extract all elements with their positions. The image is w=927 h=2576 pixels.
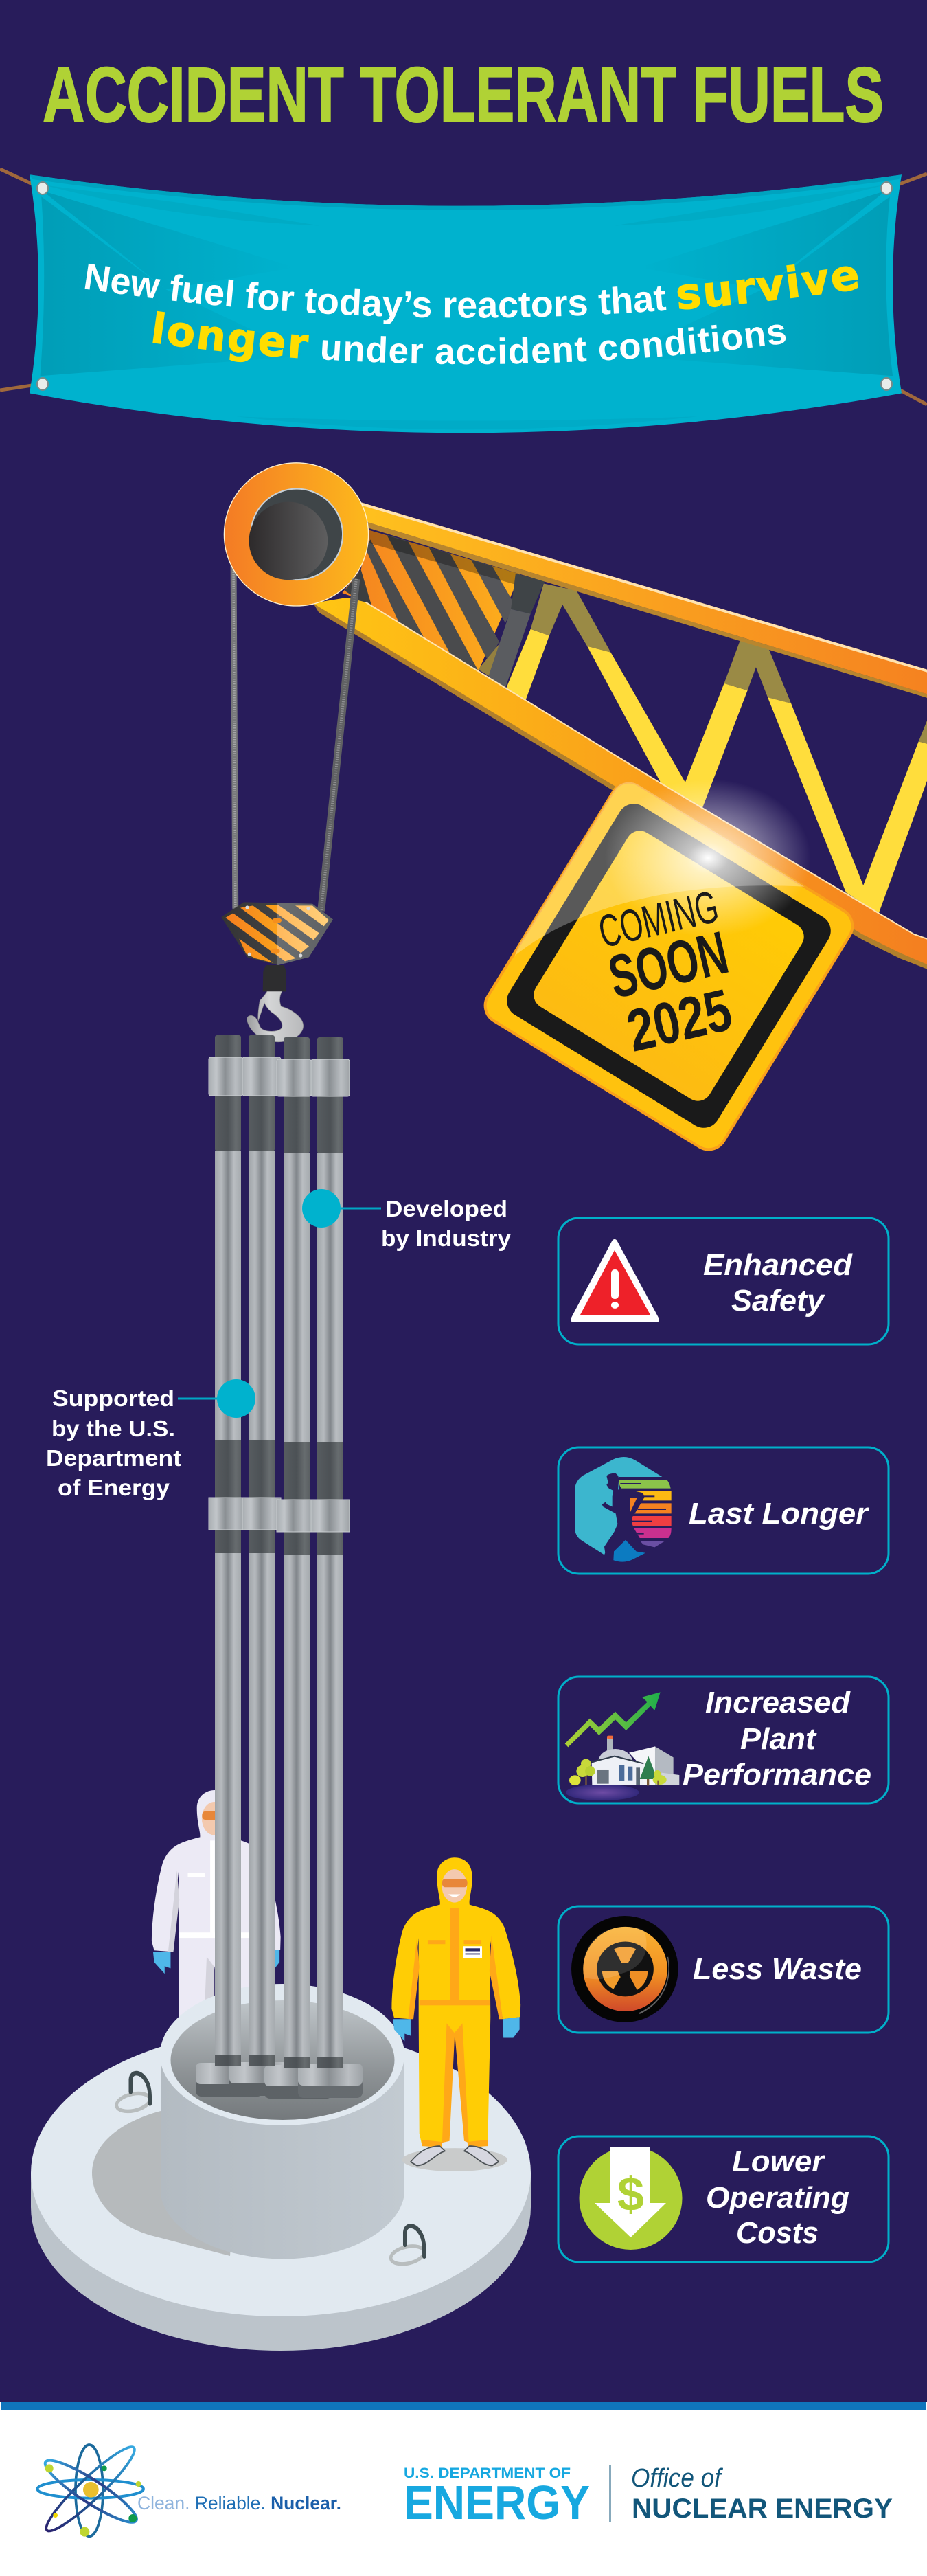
fuel rod feet [196,2062,363,2099]
suit [391,1905,520,2146]
callout text [46,1386,181,1500]
foot 1 [196,2063,263,2097]
icon: runner [575,1457,672,1562]
card: increased plant performance [558,1677,889,1803]
icon: dollar down arrow: $ [617,2167,644,2221]
callout leader [178,1397,217,1400]
goggles [202,1811,227,1820]
upper beam [361,502,927,698]
foot 4 [298,2064,363,2098]
footer blue bar [1,2402,926,2410]
right glove [263,1950,279,1970]
banner text line 1: New fuel for today’s reactors that survive [85,264,858,324]
benefit cards [558,1218,889,2262]
face [202,1802,227,1835]
grommets [37,182,892,390]
card text [706,2145,849,2250]
right rope [321,579,356,911]
lifting handles [115,2073,425,2267]
lower beam [313,598,927,969]
callout text: by Industry [381,1225,512,1251]
callout text: of Energy [58,1475,170,1500]
callout marker [302,1189,341,1228]
vessel rim [160,1984,404,2125]
card: less waste [558,1906,889,2033]
goggles [442,1879,468,1887]
cast shadow [92,2111,233,2256]
disc top [31,2029,531,2316]
DOE wordmark small: U.S. DEPARTMENT OF [404,2465,571,2481]
DOE wordmark large: ENERGY [404,2476,590,2529]
callout: supported by DOE [46,1379,255,1500]
card text: Last Longer [689,1497,870,1530]
worker in white suit [152,1790,281,2079]
card text: Plant [740,1722,817,1756]
banner text line 2: longer under accident conditions [152,310,786,364]
atom logo [37,2440,144,2538]
smile [448,1895,460,1897]
rod 2 [249,1035,275,2066]
suit trim [408,1908,503,2147]
card text [683,1686,871,1792]
coming soon sign [483,782,854,1151]
left glove [393,2019,411,2041]
pulley [224,463,369,606]
card: enhanced safety [558,1218,889,1344]
worker in yellow suit [391,1857,520,2171]
floor shadow [402,2148,507,2171]
callout leader [341,1208,381,1209]
banner ropes [0,169,927,405]
suit shading [168,1871,214,2000]
rod 3 [284,1037,310,2068]
hook [247,991,304,1042]
right glove [503,2017,520,2038]
sign text [594,881,737,1065]
left shoe [411,2146,445,2166]
rod 4 [317,1037,343,2068]
sign gloss [515,782,805,956]
face [442,1869,467,1903]
card text [703,1248,853,1318]
card text: Lower [732,2145,826,2178]
right shoe [464,2146,499,2166]
icon: warning triangle [573,1242,656,1320]
card text: Operating [706,2181,849,2215]
nuclear energy: NUCLEAR ENERGY [632,2494,893,2524]
sign text: 2025 [621,977,737,1065]
suit [152,1837,281,2079]
left rope [233,565,236,909]
icon: dollar down arrow [580,2147,683,2250]
card: last longer [558,1447,889,1574]
callout text: Supported [52,1386,174,1411]
callout text [381,1196,512,1251]
hood [437,1857,472,1907]
callout marker [217,1379,255,1418]
hook block [221,902,333,965]
hook assembly [221,902,333,1042]
hook shaft [263,965,286,991]
banner cloth [30,174,902,433]
card text: Safety [731,1284,826,1318]
footer [0,2402,927,2576]
suit details [179,1840,250,1938]
crane boom [224,463,927,969]
callout: developed by industry [302,1189,512,1251]
rod 1 [215,1035,241,2066]
callout text: Department [46,1445,181,1471]
lattice [505,584,927,914]
callout text: by the U.S. [52,1416,175,1441]
vessel well [170,2000,394,2120]
office of: Office of [631,2464,723,2493]
foot 2 [229,2062,298,2096]
ID badge [464,1946,482,1958]
card text: Costs [736,2216,819,2250]
card text: Increased [705,1686,851,1719]
logo divider [610,2465,611,2522]
banner [0,168,927,433]
card text: Enhanced [703,1248,853,1282]
reactor vessel [160,1984,404,2259]
left glove [153,1952,170,1974]
card: lower operating costs [558,2136,889,2262]
sign text: COMING [594,881,723,957]
foot 3 [264,2065,332,2099]
hood [197,1790,232,1839]
card text: Performance [683,1758,871,1792]
base disc [31,2029,531,2351]
vessel wall [161,2055,404,2259]
icon: plant and growth arrow [565,1692,679,1800]
card text: Less Waste [693,1952,862,1986]
sign text: SOON [602,918,734,1011]
upper collars [209,1057,350,1096]
lower collars [209,1498,350,1532]
sign glow [605,779,811,937]
disc side [31,2173,531,2351]
hazard striped panel [342,530,545,688]
callout text: Developed [385,1196,507,1221]
fuel rods [209,1035,350,2068]
sign plate [479,776,859,1156]
tagline: Clean. Reliable. Nuclear. [137,2493,341,2513]
footer background [0,2402,927,2576]
icon: radiation symbol [571,1916,678,2022]
